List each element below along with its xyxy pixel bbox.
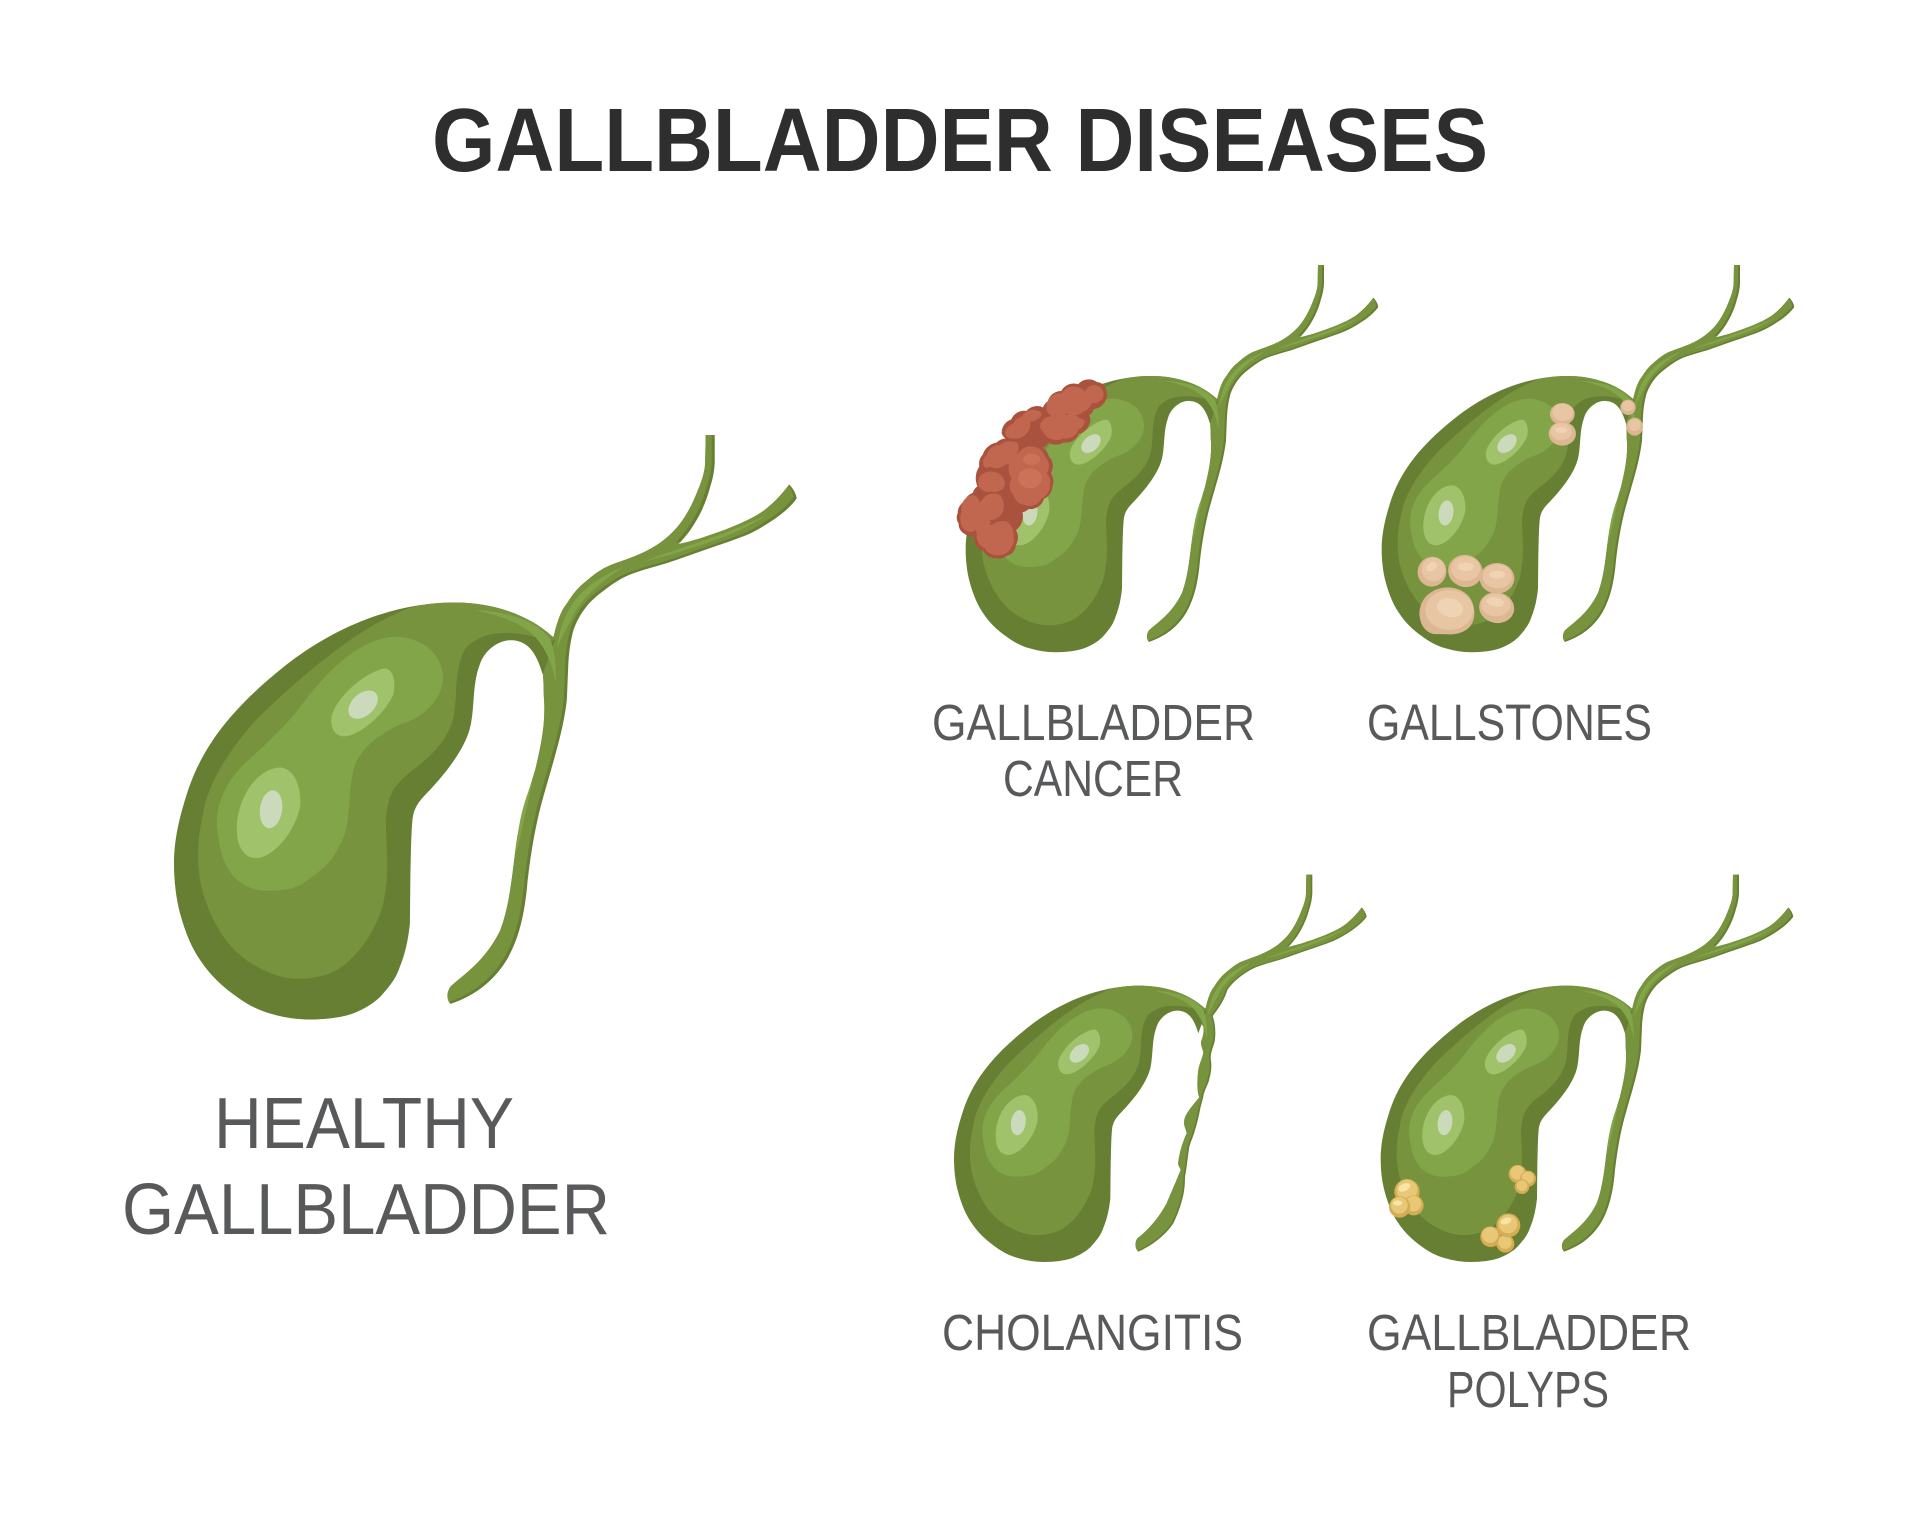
label: cholangitis: CHOLANGITIS: [942, 1304, 1243, 1361]
label: healthy gallbladder: [122, 1084, 610, 1250]
polyp clusters: [1389, 1165, 1536, 1253]
narrowed wavy bile duct: [1134, 874, 1367, 1252]
title: GALLBLADDER DISEASES: [432, 91, 1488, 191]
tumor mass: [957, 380, 1106, 558]
label: gallbladder cancer: [932, 694, 1255, 807]
label: healthy gallbladder: HEALTHY: [214, 1084, 514, 1164]
gallbladder body: [954, 986, 1207, 1262]
label: gallbladder polyps: [1367, 1304, 1691, 1418]
label: gallstones: GALLSTONES: [1367, 694, 1652, 751]
panel: gallbladder cancer illustration: [957, 264, 1378, 652]
label: healthy gallbladder: GALLBLADDER: [122, 1170, 610, 1250]
panel: gallbladder polyps illustration: [1381, 874, 1793, 1262]
label: gallbladder cancer: GALLBLADDER: [932, 694, 1255, 751]
label: gallbladder polyps: GALLBLADDER: [1367, 1304, 1691, 1361]
gallstones: [1413, 400, 1643, 634]
label: gallbladder polyps: POLYPS: [1447, 1361, 1609, 1418]
panel: cholangitis illustration: [954, 874, 1367, 1262]
panel: gallstones illustration: [1382, 264, 1794, 652]
panel: healthy gallbladder illustration: [174, 434, 797, 1020]
label: gallbladder cancer: CANCER: [1003, 750, 1183, 807]
